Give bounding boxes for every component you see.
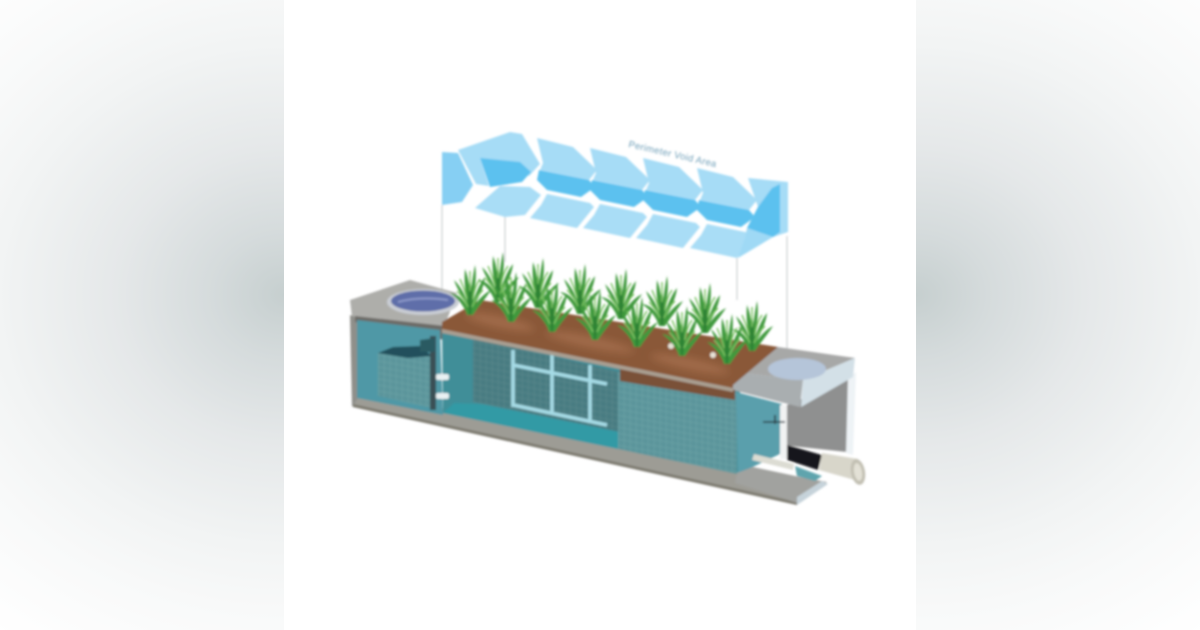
outlet stubs — [436, 374, 449, 399]
lower soil band — [620, 368, 735, 400]
inspection frame pipes — [513, 350, 607, 425]
front row plants — [491, 272, 748, 364]
right gradient panel — [916, 0, 1200, 630]
back row plants — [450, 252, 773, 351]
soil bed — [442, 300, 778, 400]
vault floor front edge — [353, 390, 800, 505]
plants — [450, 252, 773, 364]
void area label: Perimeter Void Area — [627, 139, 718, 170]
concrete vault — [350, 280, 800, 505]
right end wall — [747, 178, 788, 237]
central grid modules behind frame — [473, 338, 620, 432]
left chamber water — [357, 320, 443, 415]
left chamber stormwater module — [378, 336, 436, 410]
outlet pipe — [819, 453, 862, 482]
back wall — [782, 380, 848, 452]
left lid circle — [387, 289, 459, 315]
chevron panel 2 — [530, 138, 597, 228]
right chamber — [735, 372, 867, 505]
chevron panel 5 — [690, 168, 757, 258]
left gradient panel — [0, 0, 284, 630]
large media block — [618, 372, 737, 474]
diagram — [350, 132, 867, 505]
right floor — [735, 467, 827, 503]
white side wall — [846, 372, 856, 455]
right end floor — [738, 228, 773, 258]
left concrete lid — [350, 280, 457, 330]
soil mottling — [465, 309, 730, 378]
center chamber back wall — [442, 330, 740, 473]
perimeter void area chevrons — [442, 132, 788, 258]
right chamber water — [736, 392, 782, 474]
floor water — [443, 403, 618, 449]
concrete lip — [442, 329, 733, 392]
chevron panel 1 — [458, 132, 541, 217]
floor water pool — [795, 466, 822, 481]
vertical riser pipe — [780, 405, 787, 459]
valve handle — [763, 415, 785, 424]
soil top surface — [442, 300, 778, 392]
black coupling — [787, 445, 822, 470]
left end wall — [442, 152, 473, 205]
projection lines — [442, 205, 787, 352]
right concrete lid — [733, 347, 855, 407]
chevron panel 3 — [583, 148, 650, 238]
left wall — [350, 315, 358, 407]
horizontal tee pipe — [752, 454, 794, 470]
chevron panel 4 — [636, 158, 703, 248]
right lid circle — [768, 358, 826, 380]
left chamber inner shadow — [355, 316, 445, 340]
small soil stones — [668, 343, 716, 358]
